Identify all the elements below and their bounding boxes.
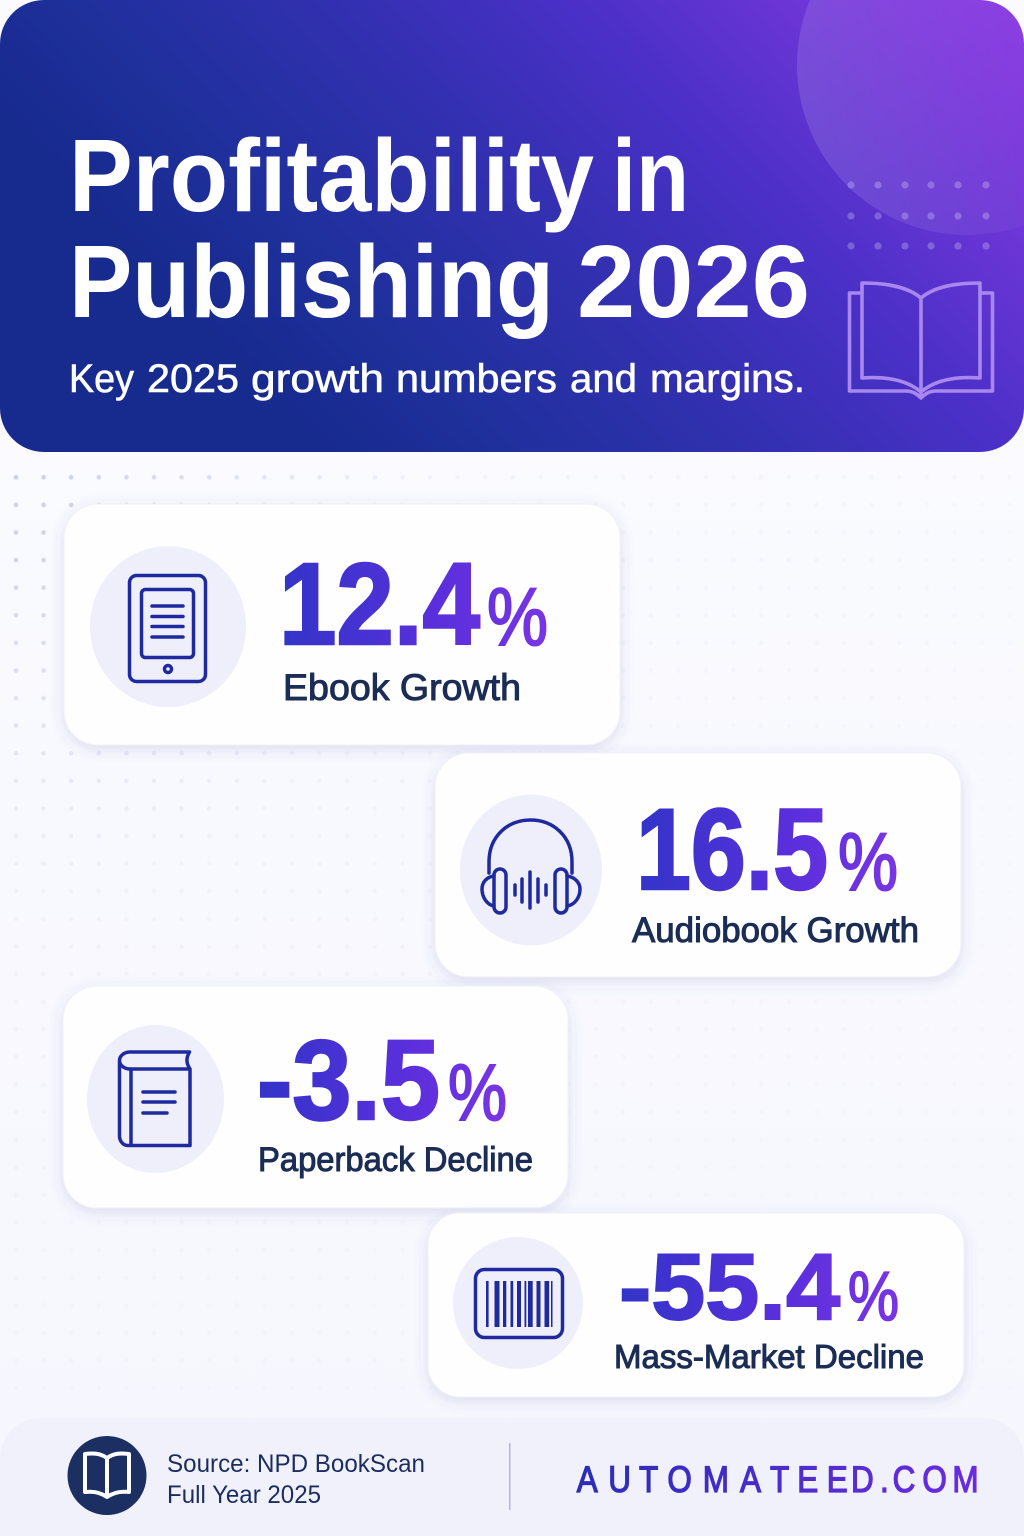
title: Publishing <box>69 224 554 339</box>
subtitle: margins. <box>650 357 805 401</box>
value -3.5%: % <box>448 1048 507 1137</box>
value -3.5%: -3.5 <box>257 1017 440 1143</box>
footer panel <box>0 1418 1024 1536</box>
icon: barcode <box>476 1270 562 1338</box>
source text: Full Year 2025 <box>167 1481 321 1509</box>
card background <box>428 1213 964 1397</box>
icon circle <box>453 1237 583 1369</box>
icon: e-reader <box>130 576 206 682</box>
icon circle <box>90 546 246 707</box>
label: Audiobook Growth <box>632 911 919 950</box>
card background <box>435 753 961 977</box>
value -55.4%: -55.4 <box>619 1234 840 1339</box>
header gradient panel <box>0 0 1024 452</box>
card background <box>63 986 568 1208</box>
background dot pattern <box>14 474 432 891</box>
decorative dot grid <box>847 181 990 250</box>
footer background <box>0 1418 1024 1536</box>
subtitle: numbers <box>396 357 557 401</box>
subtitle <box>72 362 802 401</box>
title: 2026 <box>577 224 810 339</box>
panel: mass-market decline card <box>428 1213 964 1397</box>
value 16.5%: % <box>838 817 898 908</box>
value -55.4%: % <box>848 1257 899 1335</box>
subtitle: and <box>570 357 637 401</box>
panel: paperback decline card <box>63 986 568 1208</box>
panel: ebook growth card <box>64 504 620 745</box>
icon: headphones <box>482 820 580 913</box>
label: Ebook Growth <box>283 667 521 708</box>
subtitle: 2025 <box>147 357 239 401</box>
title: Profitability <box>69 118 594 233</box>
value 16.5%: 16.5 <box>636 786 828 914</box>
value 12.4%: 12.4 <box>279 539 480 669</box>
title <box>69 118 810 339</box>
title: in <box>612 118 689 233</box>
card background <box>64 504 620 745</box>
divider <box>509 1443 510 1510</box>
icon: footer book badge <box>68 1436 146 1515</box>
icon: closed book <box>120 1052 190 1146</box>
value 12.4%: % <box>487 572 548 663</box>
icon: open book outline <box>850 283 992 398</box>
panel: audiobook growth card <box>435 753 961 977</box>
source text <box>167 1450 425 1509</box>
icon circle <box>460 794 602 946</box>
icon circle <box>87 1025 224 1173</box>
label: Mass-Market Decline <box>614 1338 924 1375</box>
decorative circle <box>797 0 1024 235</box>
source text: Source: NPD BookScan <box>167 1450 425 1478</box>
subtitle: Key <box>69 357 134 401</box>
brand wordmark: AUTOMATEED.COM <box>577 1460 979 1501</box>
label: Paperback Decline <box>258 1141 533 1179</box>
header banner <box>0 0 1024 452</box>
subtitle: growth <box>251 357 384 401</box>
